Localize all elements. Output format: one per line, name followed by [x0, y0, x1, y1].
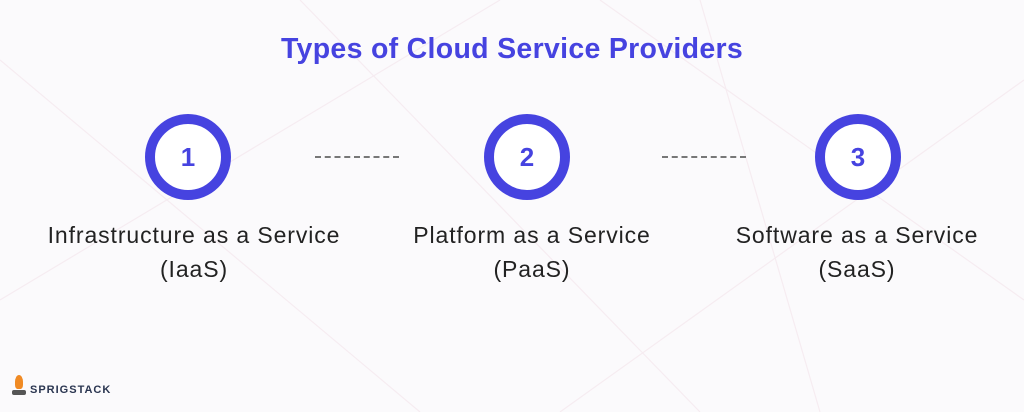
label 1	[48, 222, 340, 282]
label 1: Infrastructure as a Service	[48, 222, 340, 248]
logo	[12, 375, 111, 396]
label 1: (IaaS)	[160, 256, 228, 282]
label 3: Software as a Service	[736, 222, 978, 248]
step 3 circle: 3	[851, 142, 865, 172]
connector 1	[315, 156, 399, 158]
step 1 circle: 1	[181, 142, 195, 172]
step 1 circle	[145, 114, 231, 200]
label 2: Platform as a Service	[413, 222, 651, 248]
label 3: (SaaS)	[818, 256, 895, 282]
logo text: SPRIGSTACK	[30, 384, 111, 396]
title: Types of Cloud Service Providers	[281, 33, 743, 65]
label 3	[736, 222, 978, 282]
step 2 circle: 2	[520, 142, 534, 172]
label 2: (PaaS)	[494, 256, 570, 282]
step 3 circle	[815, 114, 901, 200]
connector 2	[662, 156, 746, 158]
step 2 circle	[484, 114, 570, 200]
icon: flame	[15, 375, 23, 389]
label 2	[413, 222, 651, 282]
